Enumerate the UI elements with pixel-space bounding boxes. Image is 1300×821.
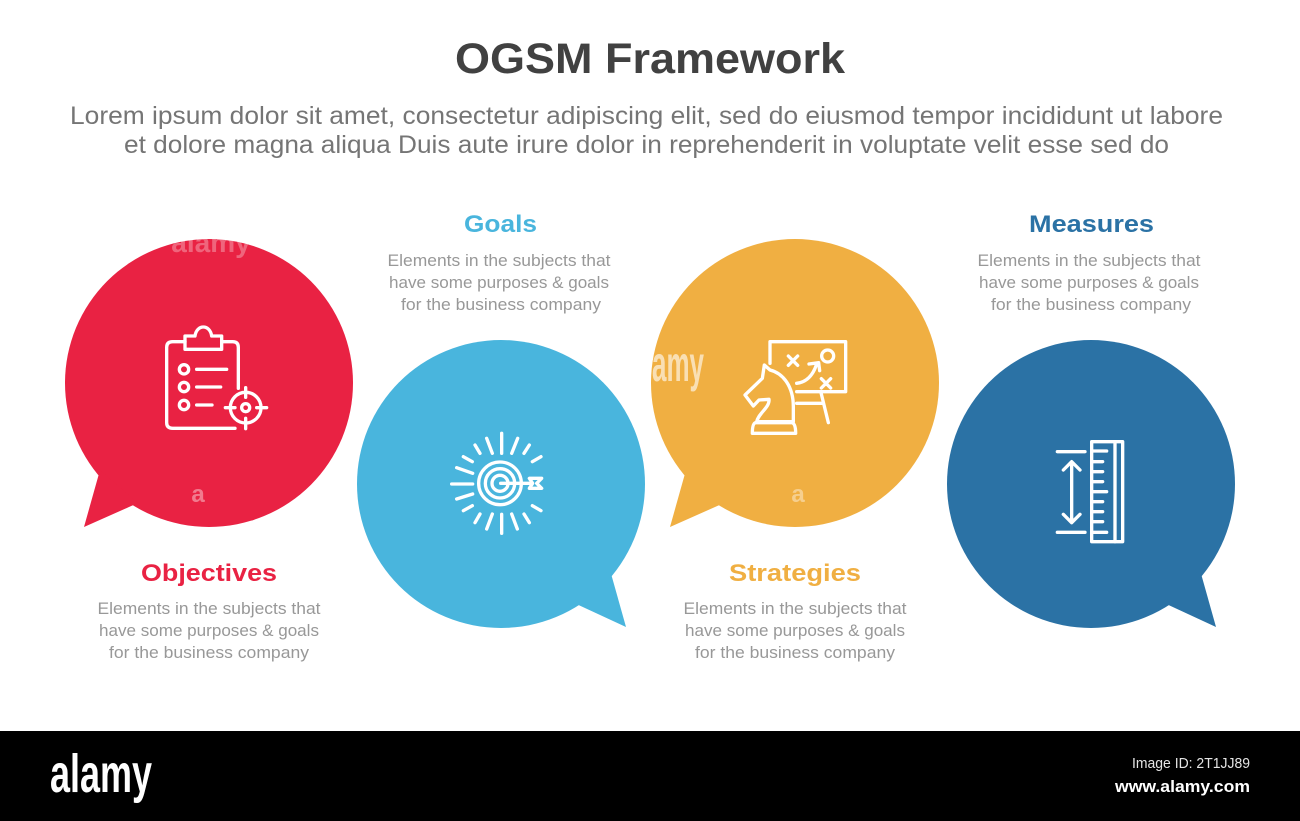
text block: goals: have some purposes & goals [389, 273, 609, 292]
heading: strategies: Strategies [729, 560, 861, 587]
text block: measures [978, 251, 1201, 314]
image id: Image ID: 2T1JJ89 [1132, 755, 1250, 772]
website: www.alamy.com [1114, 777, 1250, 796]
text block: objectives [98, 599, 321, 662]
watermark fragment on red bubble: alamy [171, 227, 251, 258]
watermark fragment on yellow bubble: amy [652, 336, 704, 392]
speech bubble: measures [947, 340, 1235, 628]
watermark fragment on red bubble: a [191, 481, 205, 508]
subtitle text [70, 102, 1223, 159]
watermark fragment on yellow bubble [652, 336, 805, 508]
icon: target with arrow and rays [452, 433, 542, 533]
text block: strategies [684, 599, 907, 662]
text block: strategies: Elements in the subjects that [684, 599, 907, 618]
heading: measures: Measures [1029, 211, 1154, 238]
speech bubble: objectives [65, 239, 353, 527]
watermark fragment on yellow bubble: a [791, 481, 805, 508]
panel: goals [357, 211, 645, 628]
speech bubble: strategies [651, 239, 939, 527]
panel: measures [947, 211, 1235, 628]
text block: strategies: for the business company [695, 643, 896, 662]
panel: objectives [65, 227, 353, 662]
watermark fragment on red bubble [172, 239, 248, 502]
subtitle text: et dolore magna aliqua Duis aute irure dolor in reprehenderit in voluptate velit esse sed do [124, 131, 1169, 159]
text block: objectives: have some purposes & goals [99, 621, 319, 640]
text block: goals: Elements in the subjects that [388, 251, 611, 270]
heading: goals: Goals [464, 211, 537, 238]
text block: measures: for the business company [991, 295, 1192, 314]
speech bubble: goals [357, 340, 645, 628]
text block: measures: Elements in the subjects that [978, 251, 1201, 270]
text block: goals [388, 251, 611, 314]
text block: objectives: Elements in the subjects that [98, 599, 321, 618]
text block: goals: for the business company [401, 295, 602, 314]
icon: ruler with height arrow [1057, 442, 1123, 542]
text block: strategies: have some purposes & goals [685, 621, 905, 640]
icon: clipboard with target [167, 327, 267, 429]
text block: objectives: for the business company [109, 643, 310, 662]
watermark logo: alamy [50, 744, 152, 804]
watermark footer bar [0, 731, 1300, 821]
heading: objectives: Objectives [141, 560, 277, 587]
text block: measures: have some purposes & goals [979, 273, 1199, 292]
panel: strategies [651, 239, 939, 662]
icon: chess knight and strategy board [745, 342, 846, 433]
title: OGSM Framework [455, 35, 845, 83]
subtitle text: Lorem ipsum dolor sit amet, consectetur adipiscing elit, sed do eiusmod tempor incididunt ut labore [70, 102, 1223, 130]
